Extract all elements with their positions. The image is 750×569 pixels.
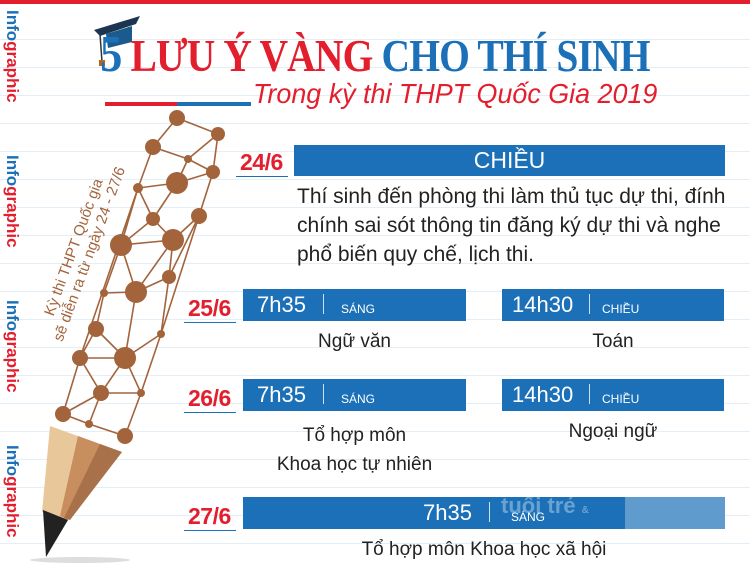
day 25/6: 7h35: [257, 292, 306, 317]
day 26/6: [184, 379, 724, 475]
day 26/6: Tổ hợp môn: [303, 425, 406, 446]
icon: graduation cap: [94, 16, 140, 66]
day 25/6: 14h30: [512, 292, 573, 317]
description: Thí sinh đến phòng thi làm thủ tục dự thi, đính chính sai sót thông tin đăng ký dự thi và nghe phổ biến quy chế, lịch thi.: [297, 185, 726, 266]
day 26/6: SÁNG: [341, 392, 375, 406]
day 26/6: 14h30: [512, 382, 573, 407]
side label 2: Info graphic: [3, 155, 22, 248]
side label 1: Info graphic: [3, 10, 22, 103]
side label 4: Info graphic: [3, 445, 22, 538]
day 25/6: SÁNG: [341, 302, 375, 316]
day 26/6: Ngoại ngữ: [569, 421, 657, 442]
day 27/6: tuổi trẻ &: [501, 493, 589, 518]
day 27/6: 27/6: [188, 503, 231, 529]
day 25/6: [184, 289, 724, 352]
day 26/6: 7h35: [257, 382, 306, 407]
day 25/6: 25/6: [188, 295, 231, 321]
rotated caption: sẽ diễn ra từ ngày 24 - 27/6: [50, 165, 129, 344]
bar: [294, 145, 725, 176]
day 27/6: SÁNG: [511, 510, 545, 524]
watermark: [625, 497, 725, 529]
day 27/6: Tổ hợp môn Khoa học xã hội: [362, 539, 606, 560]
subtitle: Trong kỳ thi THPT Quốc Gia 2019: [253, 78, 657, 109]
day 27/6: [184, 493, 725, 560]
date: 24/6: [240, 149, 283, 175]
day 25/6: CHIỀU: [602, 302, 639, 316]
day 25/6: Toán: [592, 331, 634, 352]
title: 5 LƯU Ý VÀNG CHO THÍ SINH: [100, 26, 650, 83]
day 27/6: 7h35: [423, 500, 472, 525]
rotated caption: Kỳ thi THPT Quốc gia: [41, 176, 107, 318]
title underline: [105, 102, 177, 106]
day 25/6: Ngữ văn: [318, 331, 391, 352]
top red strip: [0, 0, 750, 4]
pencil illustration: [30, 110, 225, 563]
day 26/6: Khoa học tự nhiên: [277, 454, 432, 475]
day 26/6: 26/6: [188, 385, 231, 411]
side label 3: Info graphic: [3, 300, 22, 393]
day 24/6: [236, 145, 726, 266]
bar: CHIỀU: [474, 147, 545, 173]
day 26/6: CHIỀU: [602, 392, 639, 406]
